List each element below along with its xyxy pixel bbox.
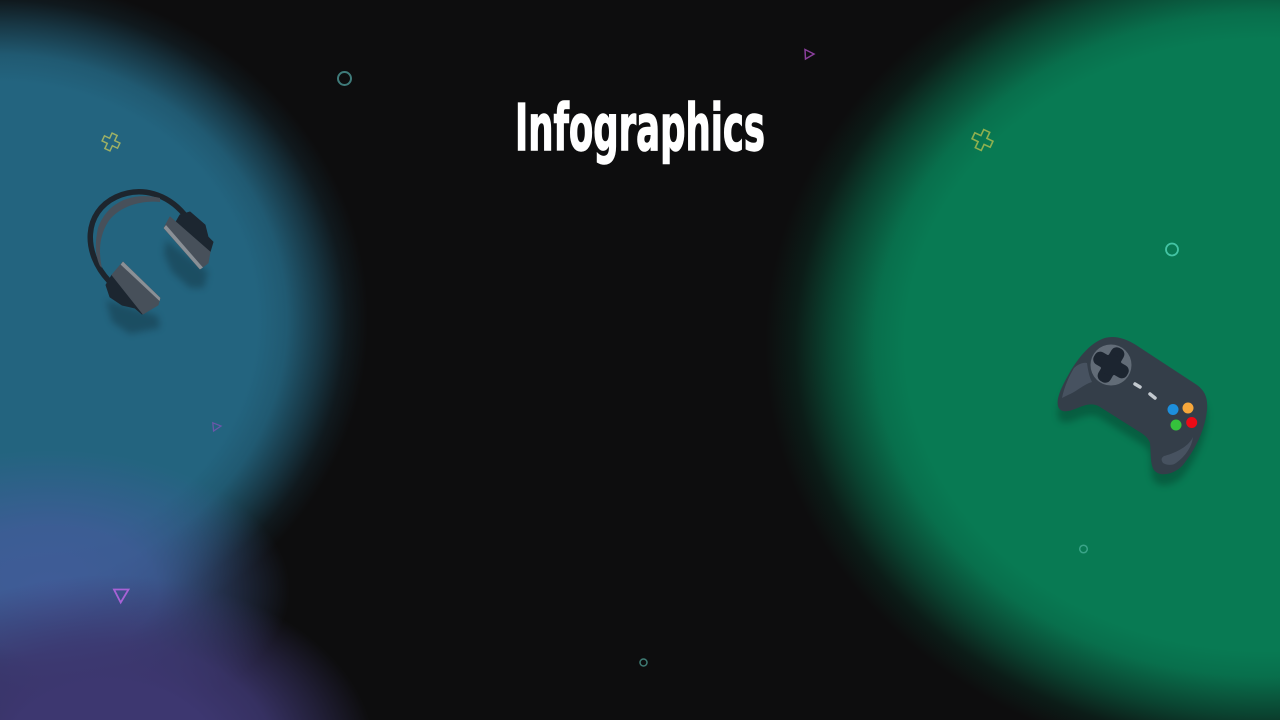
decorative circle — [1166, 244, 1178, 256]
decorative triangle — [114, 590, 128, 602]
headband inner padding — [96, 196, 160, 268]
icon: game controller — [1058, 337, 1207, 485]
right grip highlight — [1162, 437, 1193, 465]
action buttons — [1168, 402, 1197, 430]
title: Infographics — [515, 92, 765, 166]
d-pad — [1085, 339, 1137, 391]
left grip highlight — [1062, 363, 1092, 398]
decorative circle — [338, 72, 351, 85]
headband — [90, 192, 184, 281]
decorative triangle — [805, 50, 814, 59]
headphones shadow — [106, 240, 208, 334]
controller body — [1058, 337, 1207, 474]
controller shadow — [1058, 348, 1207, 485]
center buttons — [1135, 384, 1155, 398]
decorative cross — [100, 131, 122, 153]
decorative triangle — [213, 423, 221, 431]
right ear cup — [176, 212, 213, 252]
left ear cup — [106, 275, 146, 314]
decorative cross — [969, 127, 996, 153]
decorative circle — [640, 659, 647, 666]
icon: headphones — [90, 192, 213, 334]
decorative circle — [1080, 545, 1087, 553]
